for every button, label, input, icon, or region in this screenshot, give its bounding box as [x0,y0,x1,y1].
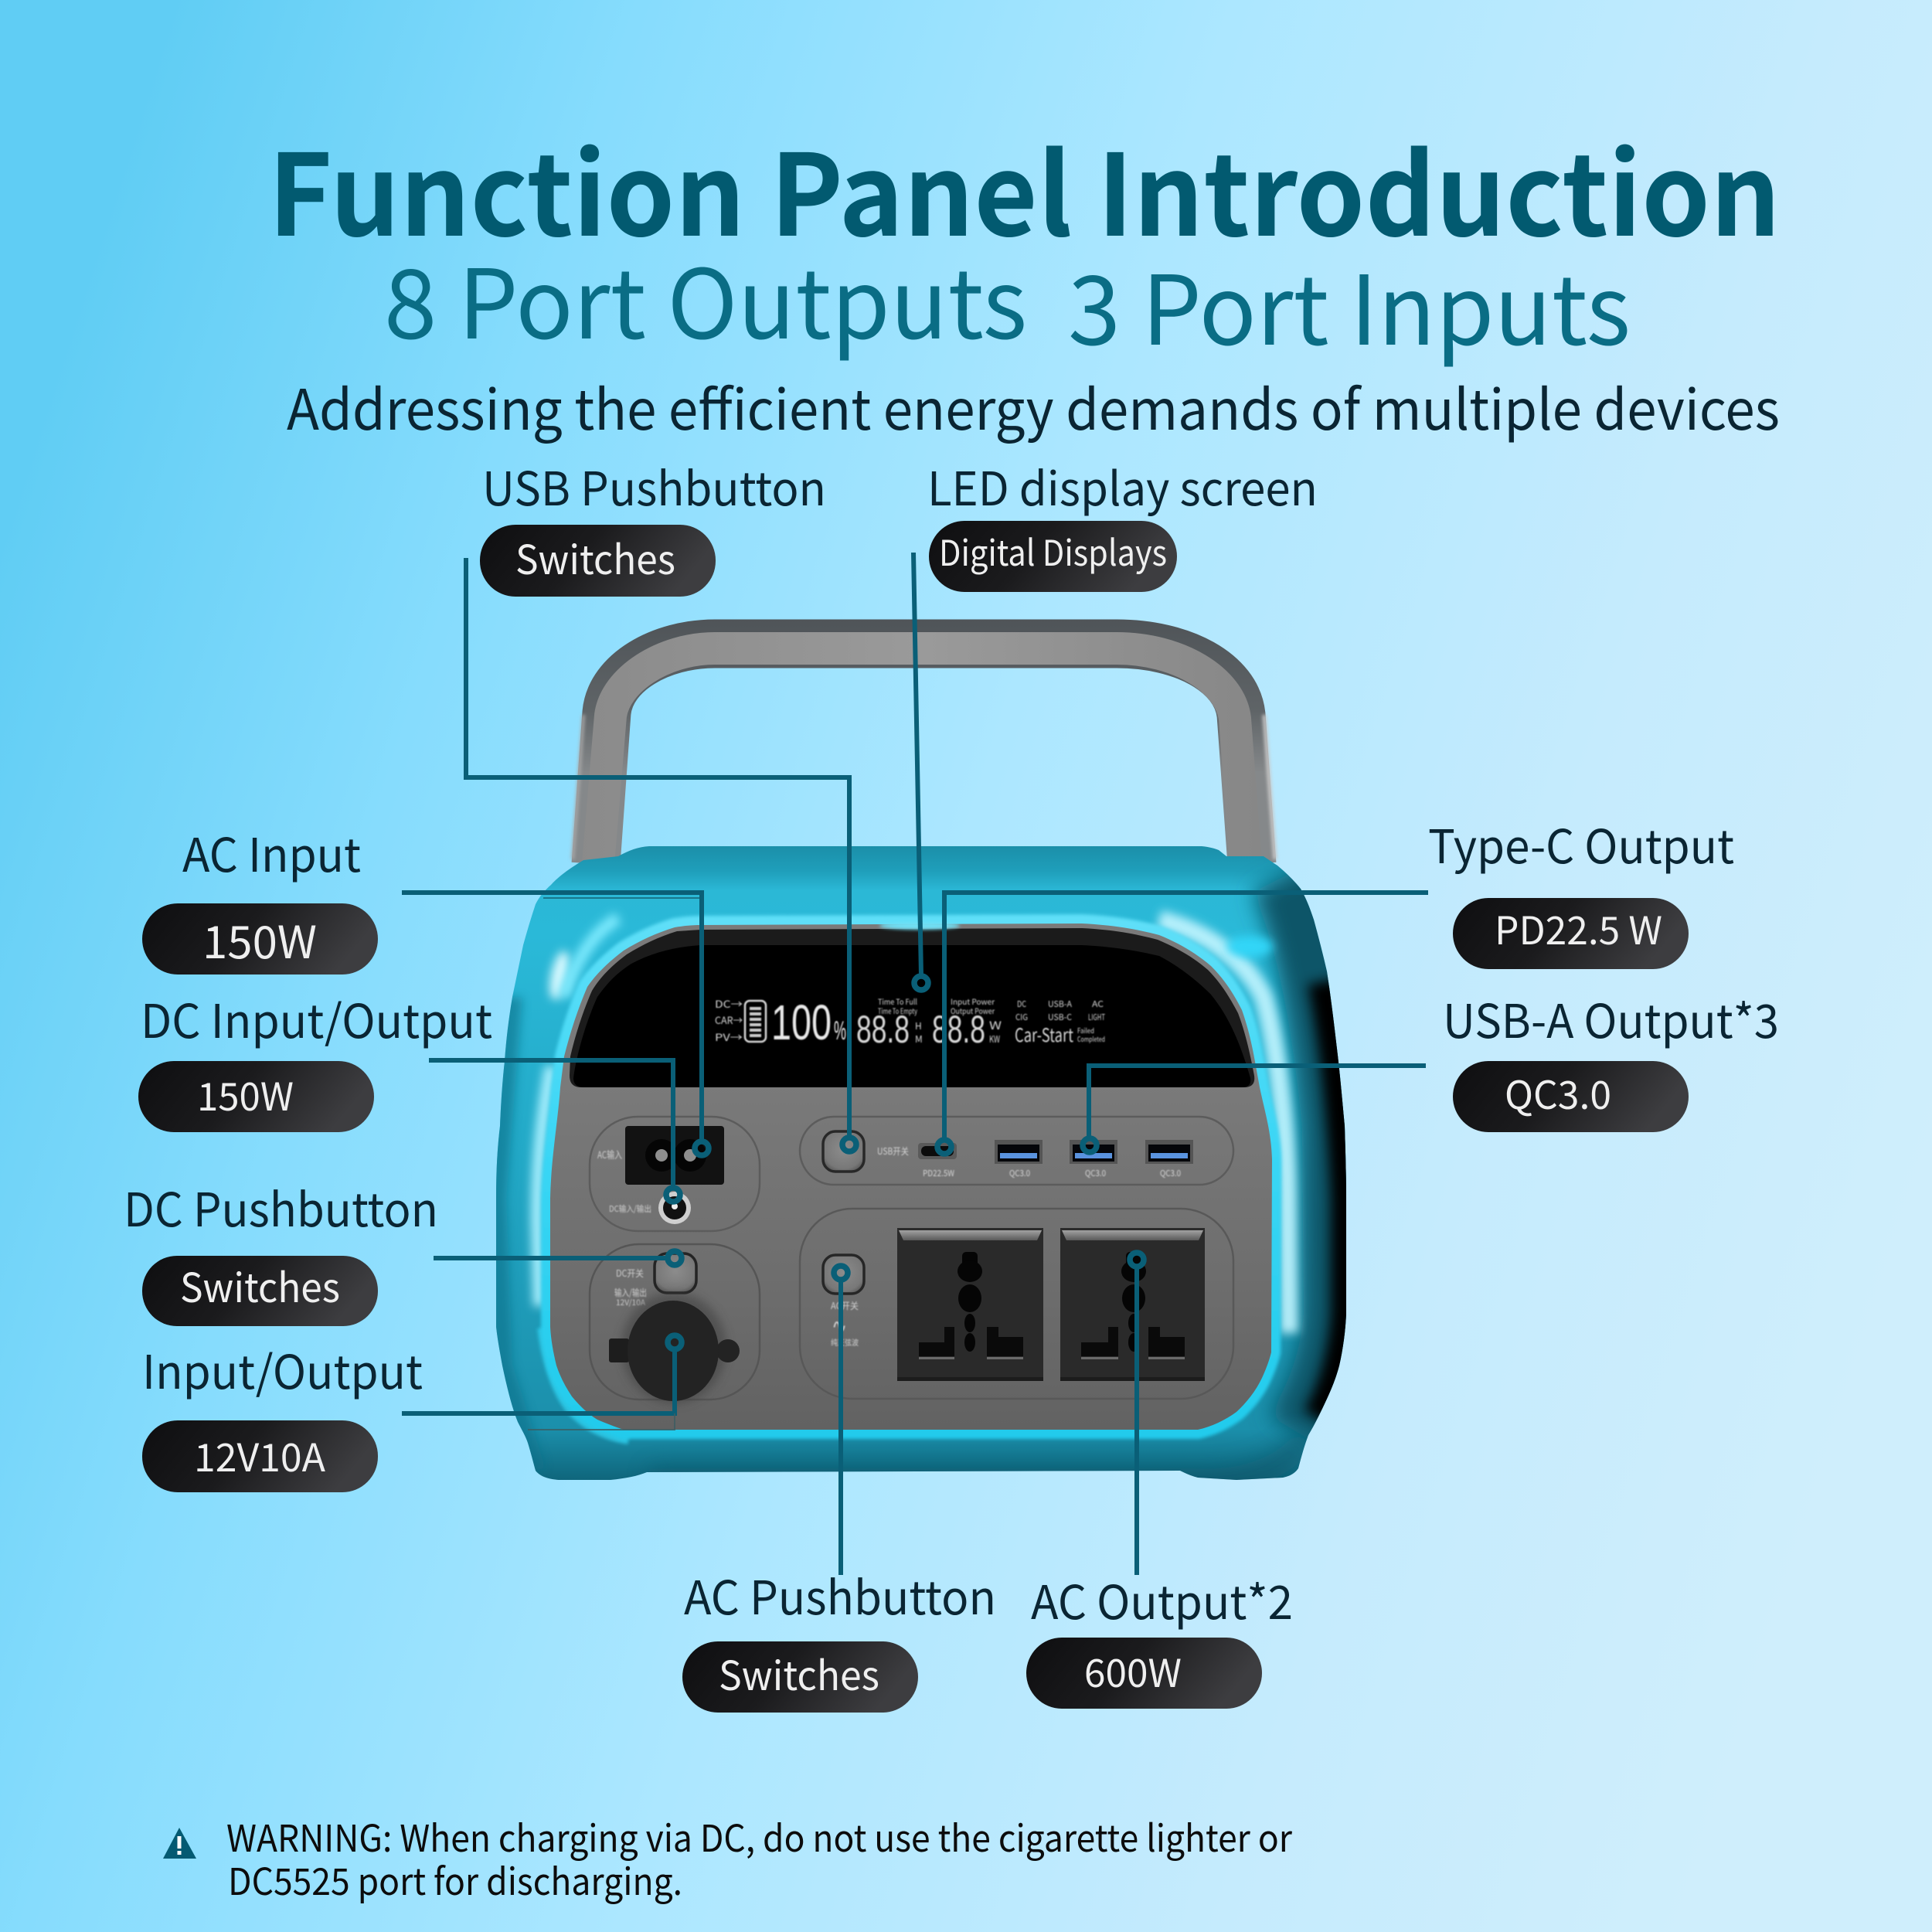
module: USB outputs: PD22.5W [923,1167,954,1179]
display readouts: 100 [771,995,832,1050]
module: DC: 12V/10A [616,1296,646,1308]
handle [573,644,1275,864]
callout: USB pushbutton: Switches [515,528,675,586]
cyan rim light [550,923,1272,1430]
display readouts: H [915,1019,922,1032]
warning text: WARNING: When charging via DC, do not use the cigarette lighter or [226,1808,1292,1862]
AC socket 1 [897,1228,1043,1381]
callout: DC pushbutton: Switches [180,1256,340,1314]
body shading and highlights [496,873,1346,1480]
display readouts: USB-C [1048,1011,1072,1023]
connector: AC output [1130,1253,1144,1575]
callout: LED display [927,452,1318,592]
display readouts: 88.8 [856,1008,910,1051]
display readouts: Car-Start [1015,1020,1073,1047]
display screen [573,945,1250,1087]
display readouts: Time To Empty [878,1005,918,1016]
callout: AC output: AC Output*2 [1031,1566,1293,1633]
display readouts: CAR→ [715,1012,743,1027]
display readouts: M [915,1032,923,1046]
front panel [550,923,1272,1430]
battery gauge [745,1001,766,1042]
connector: USB pushbutton [466,558,856,1151]
display readouts [715,995,1105,1051]
display readouts: USB-A [1048,998,1072,1010]
display readouts: % [834,1016,846,1046]
display readouts: PV→ [715,1029,743,1044]
power station product illustration [496,644,1346,1480]
callout: USB pushbutton: USB Pushbutton [482,452,826,519]
callout: Type-C output: PD22.5 W [1495,900,1662,956]
AC socket 2 [1060,1228,1205,1381]
subtitle: inputs: 3 Port Inputs [1068,233,1631,372]
callout: AC pushbutton: AC Pushbutton [684,1561,996,1628]
callout: DC pushbutton [124,1173,438,1326]
module: DC [590,1244,760,1403]
connector: AC pushbutton [834,1266,848,1575]
display readouts: Output Power [951,1005,995,1016]
connector: LED display [913,553,928,990]
callout: AC input: AC Input [182,818,361,886]
display readouts: LIGHT [1088,1011,1105,1023]
display readouts: AC [1092,998,1104,1010]
module: USB outputs [800,1117,1233,1185]
display readouts: DC→ [715,996,743,1011]
connector: AC input [402,893,709,1155]
warning text [226,1808,1292,1906]
callout: USB pushbutton [480,452,826,597]
display readouts: Time To Full [878,995,917,1007]
display readouts: DC [1017,998,1026,1010]
display readouts: KW [989,1032,1000,1046]
module: USB outputs: QC3.0 [1160,1167,1181,1179]
callout: input/output: 12V10A [194,1427,326,1483]
warning text: DC5525 port for discharging. [228,1852,682,1906]
callout: DC input/output: 150W [197,1066,294,1122]
connector: input/output [402,1335,682,1430]
callout: input/output [142,1335,423,1492]
bezel highlight [879,922,960,930]
callout: DC input/output: DC Input/Output [141,985,492,1052]
module: AC input [590,1117,760,1231]
tagline: Addressing the efficient energy demands of multiple devices [287,365,1780,446]
screen bezel [570,928,1254,1087]
callout: Type-C output [1428,810,1734,969]
module: USB outputs: QC3.0 [1009,1167,1030,1179]
connector: Type-C [937,893,1428,1154]
connector: DC pushbutton [434,1251,682,1265]
module: DC: DC开关 [616,1267,644,1280]
callout: DC pushbutton: DC Pushbutton [124,1173,438,1240]
subtitle: outputs: 8 Port Outputs [384,227,1027,366]
callout: USB-A output [1443,985,1779,1132]
title: Function Panel Introduction [268,106,1781,269]
module: AC outputs: ∿ [832,1311,847,1338]
module: AC input: DC输入/输出 [609,1202,651,1215]
device body [496,846,1346,1480]
connector: USB-A [1083,1066,1426,1152]
callout: LED display: LED display screen [927,452,1318,519]
callout: AC output: 600W [1084,1643,1182,1699]
callout: AC input: 150W [202,906,317,971]
display readouts: 88.8 [932,1008,985,1051]
display readouts: Completed [1077,1034,1105,1044]
icon: warning triangle [163,1828,196,1859]
callout: AC output [1026,1566,1293,1709]
callout: Type-C output: Type-C Output [1428,810,1734,877]
callout: AC input [142,818,378,975]
module: DC: 输入/输出 [614,1286,647,1299]
callout: AC pushbutton [682,1561,996,1713]
callout: LED display: Digital Displays [939,526,1167,577]
callout: USB-A output: USB-A Output*3 [1443,985,1779,1052]
callout: input/output: Input/Output [142,1335,423,1403]
module: AC outputs: 纯正弦波 [831,1336,859,1348]
module: AC outputs: AC开关 [831,1299,859,1312]
display readouts: Failed [1077,1026,1094,1036]
connector: DC input/output [429,1060,680,1202]
display readouts: Input Power [951,995,995,1007]
callout: USB-A output: QC3.0 [1505,1065,1611,1121]
display readouts: W [989,1018,1002,1033]
callout: DC input/output [138,985,492,1132]
module: USB outputs: QC3.0 [1085,1167,1106,1179]
module: AC input: AC输入 [597,1147,622,1162]
module: USB outputs: USB开关 [877,1145,909,1158]
module: AC outputs [800,1209,1233,1399]
display readouts: CIG [1015,1011,1028,1023]
callout: AC pushbutton: Switches [719,1644,879,1702]
